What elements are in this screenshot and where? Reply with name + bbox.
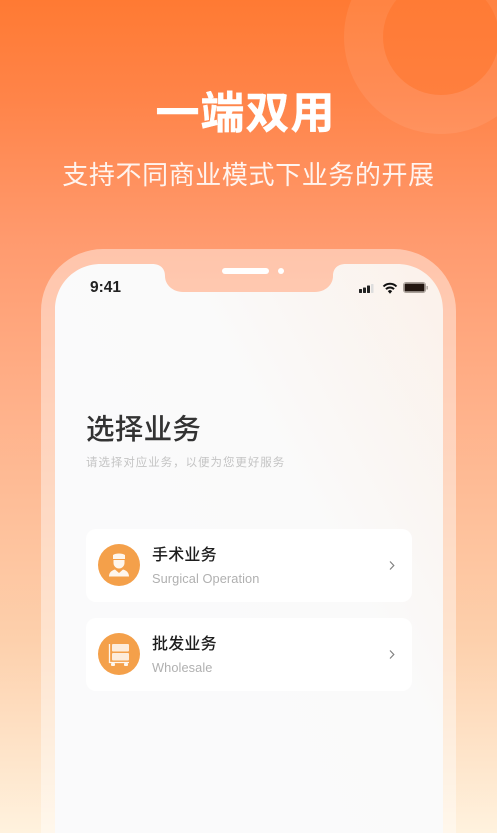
- card subtitle: Wholesale: [152, 660, 212, 675]
- phone frame: [41, 249, 456, 833]
- phone mockup: [41, 249, 456, 833]
- card title: 手术业务: [152, 547, 217, 564]
- status time: 9:41: [90, 279, 121, 296]
- card title: 批发业务: [152, 636, 217, 653]
- chevron arrow: [390, 650, 394, 659]
- icon: storage cart: [98, 633, 140, 675]
- screen heading: 选择业务: [86, 414, 201, 446]
- card subtitle: Surgical Operation: [152, 571, 259, 586]
- decorative concentric circles: [344, 0, 497, 134]
- phone screen: [55, 264, 443, 833]
- notch speaker: [222, 268, 269, 274]
- subtitle: 支持不同商业模式下业务的开展: [62, 160, 435, 190]
- screen subheading: 请选择对应业务，以便为您更好服务: [86, 457, 285, 469]
- icon: surgeon: [98, 544, 140, 586]
- status icons: [359, 282, 428, 294]
- card: surgical operation: [86, 529, 412, 602]
- notch camera: [278, 268, 284, 274]
- title: 一端双用: [156, 89, 336, 138]
- card: wholesale: [86, 618, 412, 691]
- chevron arrow: [390, 561, 394, 570]
